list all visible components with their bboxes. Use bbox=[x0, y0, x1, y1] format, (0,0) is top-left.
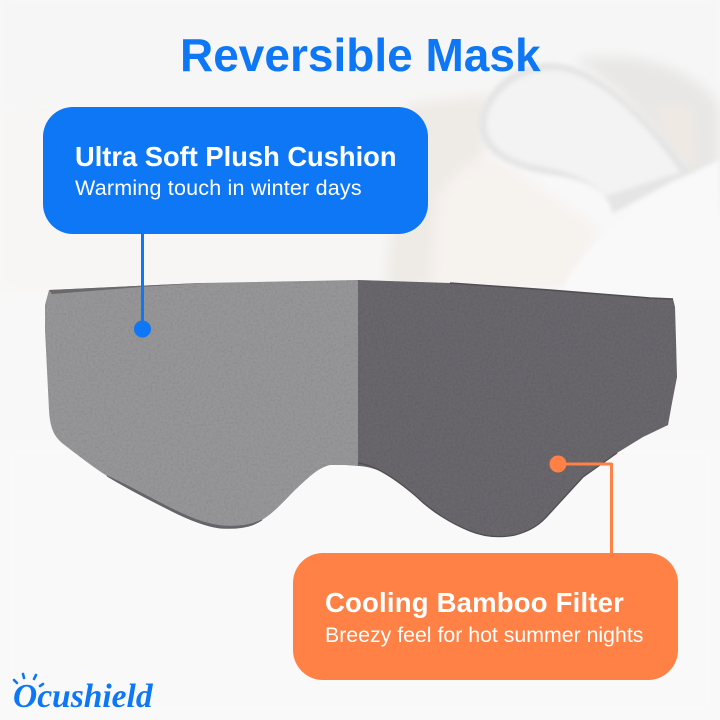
callout description: Breezy feel for hot summer nights bbox=[325, 623, 643, 647]
background mask band bbox=[479, 63, 690, 214]
logo wordmark: Ocushield bbox=[13, 678, 153, 715]
top dark edge of plush side bbox=[49, 283, 204, 294]
callout heading: Ultra Soft Plush Cushion bbox=[75, 141, 396, 172]
bamboo filter side bbox=[358, 280, 677, 537]
icon: sun rays bbox=[12, 672, 44, 688]
callout description: Warming touch in winter days bbox=[75, 176, 362, 200]
callout heading: Cooling Bamboo Filter bbox=[325, 587, 624, 618]
plush cushion side bbox=[45, 280, 358, 528]
title: Reversible Mask bbox=[180, 29, 541, 81]
logo: Ocushield bbox=[12, 672, 153, 715]
callout: ultra soft plush cushion bbox=[43, 107, 428, 234]
top seam of bamboo side bbox=[450, 283, 673, 299]
bottom seam of bamboo side bbox=[358, 453, 617, 537]
callout: cooling bamboo filter bbox=[293, 553, 678, 680]
bottom seam of plush side bbox=[107, 476, 262, 528]
